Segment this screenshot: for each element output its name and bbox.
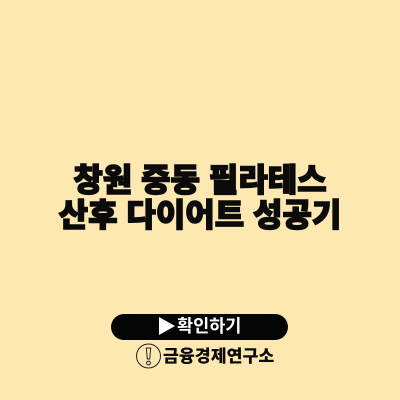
title line 2: 산후 다이어트 성공기 [59, 197, 341, 233]
icon: play triangle [159, 317, 175, 335]
button: confirm [111, 314, 288, 340]
icon: exclamation circle [136, 344, 161, 368]
brand name: 금융경제연구소 [163, 346, 274, 366]
brand logo [136, 344, 274, 368]
button label: 확인하기 [177, 316, 241, 336]
title [58, 162, 341, 233]
title line 1: 창원 중동 필라테스 [73, 162, 327, 198]
